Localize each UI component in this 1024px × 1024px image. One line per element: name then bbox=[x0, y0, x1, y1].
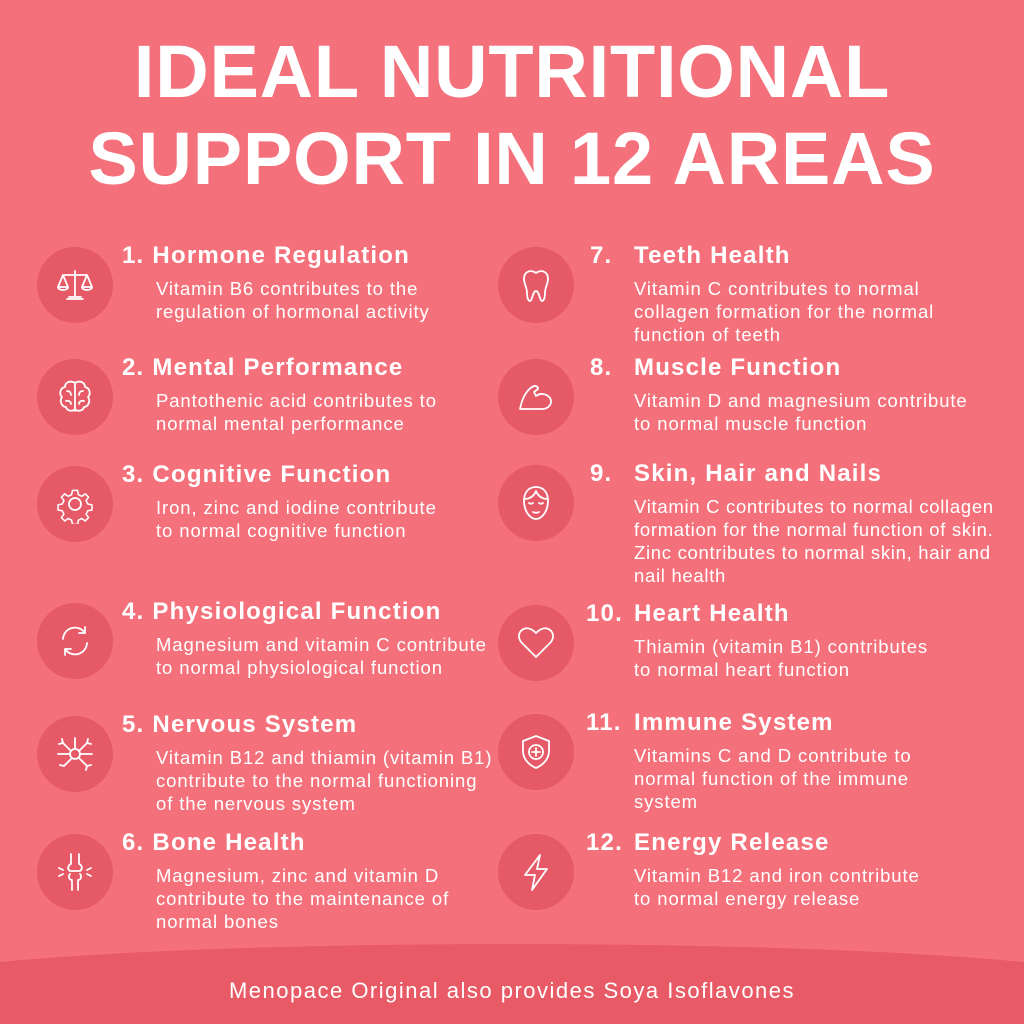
text bbox=[156, 634, 487, 678]
heading text: Teeth Health bbox=[634, 242, 791, 269]
heading: 6. Bone Health bbox=[122, 829, 306, 856]
text: collagen formation for the normal bbox=[634, 301, 934, 322]
icon: shield bbox=[498, 714, 574, 790]
item 2 bbox=[37, 354, 437, 435]
text: Iron, zinc and iodine contribute bbox=[156, 497, 437, 518]
text: to normal heart function bbox=[634, 659, 850, 680]
text: system bbox=[634, 791, 698, 812]
text: Pantothenic acid contributes to bbox=[156, 390, 437, 411]
icon: muscle bbox=[498, 359, 574, 435]
text: to normal muscle function bbox=[634, 413, 867, 434]
heading: 10. bbox=[586, 600, 623, 627]
heading text: Muscle Function bbox=[634, 354, 841, 381]
footer band bbox=[0, 944, 1024, 1024]
text: normal function of the immune bbox=[634, 768, 909, 789]
text: contribute to the normal functioning bbox=[156, 770, 477, 791]
icon: face bbox=[498, 465, 574, 541]
title: SUPPORT IN 12 AREAS bbox=[88, 117, 936, 200]
text bbox=[156, 497, 437, 541]
item 3 bbox=[37, 461, 437, 542]
text: formation for the normal function of skin. bbox=[634, 519, 993, 540]
text bbox=[156, 865, 449, 932]
item 12 bbox=[498, 829, 920, 910]
text: Thiamin (vitamin B1) contributes bbox=[634, 636, 928, 657]
text: Magnesium, zinc and vitamin D bbox=[156, 865, 439, 886]
text: Vitamin C contributes to normal collagen bbox=[634, 496, 994, 517]
icon: cycle bbox=[37, 603, 113, 679]
text: Vitamin C contributes to normal bbox=[634, 278, 920, 299]
text: contribute to the maintenance of bbox=[156, 888, 449, 909]
heading text: Skin, Hair and Nails bbox=[634, 460, 882, 487]
heading: 9. bbox=[590, 460, 612, 487]
heading: 3. Cognitive Function bbox=[122, 461, 391, 488]
title bbox=[88, 30, 936, 200]
text: nail health bbox=[634, 565, 726, 586]
item 7 bbox=[498, 242, 934, 345]
text bbox=[634, 636, 928, 680]
text bbox=[634, 496, 994, 586]
heading: 12. bbox=[586, 829, 623, 856]
heading: 1. Hormone Regulation bbox=[122, 242, 410, 269]
text: Zinc contributes to normal skin, hair and bbox=[634, 542, 991, 563]
heading text: Heart Health bbox=[634, 600, 790, 627]
item 4 bbox=[37, 598, 487, 679]
text: Vitamin D and magnesium contribute bbox=[634, 390, 968, 411]
text bbox=[634, 745, 912, 812]
text: normal mental performance bbox=[156, 413, 405, 434]
item 6 bbox=[37, 829, 449, 932]
title: IDEAL NUTRITIONAL bbox=[134, 30, 890, 113]
text: to normal energy release bbox=[634, 888, 860, 909]
heading: 4. Physiological Function bbox=[122, 598, 442, 625]
text bbox=[156, 747, 492, 814]
text: regulation of hormonal activity bbox=[156, 301, 430, 322]
text: to normal physiological function bbox=[156, 657, 443, 678]
footer text: Menopace Original also provides Soya Isoflavones bbox=[229, 978, 795, 1003]
icon: heart bbox=[498, 605, 574, 681]
text bbox=[156, 390, 437, 434]
item 5 bbox=[37, 711, 492, 814]
text: Vitamin B12 and thiamin (vitamin B1) bbox=[156, 747, 492, 768]
text: to normal cognitive function bbox=[156, 520, 406, 541]
heading text: Immune System bbox=[634, 709, 834, 736]
icon: gear bbox=[37, 466, 113, 542]
item 8 bbox=[498, 354, 968, 435]
icon: brain bbox=[37, 359, 113, 435]
text bbox=[156, 278, 430, 322]
item 9 bbox=[498, 460, 994, 586]
text: function of teeth bbox=[634, 324, 781, 345]
icon: lightning bbox=[498, 834, 574, 910]
text: normal bones bbox=[156, 911, 279, 932]
text: Magnesium and vitamin C contribute bbox=[156, 634, 487, 655]
icon: joint bbox=[37, 834, 113, 910]
icon: tooth bbox=[498, 247, 574, 323]
heading: 5. Nervous System bbox=[122, 711, 357, 738]
heading: 7. bbox=[590, 242, 612, 269]
heading: 2. Mental Performance bbox=[122, 354, 403, 381]
text: Vitamin B6 contributes to the bbox=[156, 278, 418, 299]
item 1 bbox=[37, 242, 430, 323]
text bbox=[634, 865, 920, 909]
text bbox=[634, 390, 968, 434]
item 10 bbox=[498, 600, 928, 681]
heading text: Energy Release bbox=[634, 829, 830, 856]
text bbox=[634, 278, 934, 345]
item 11 bbox=[498, 709, 912, 812]
heading: 8. bbox=[590, 354, 612, 381]
text: of the nervous system bbox=[156, 793, 356, 814]
heading: 11. bbox=[586, 709, 622, 736]
text: Vitamins C and D contribute to bbox=[634, 745, 912, 766]
icon: neuron bbox=[37, 716, 113, 792]
text: Vitamin B12 and iron contribute bbox=[634, 865, 920, 886]
icon: scales bbox=[37, 247, 113, 323]
